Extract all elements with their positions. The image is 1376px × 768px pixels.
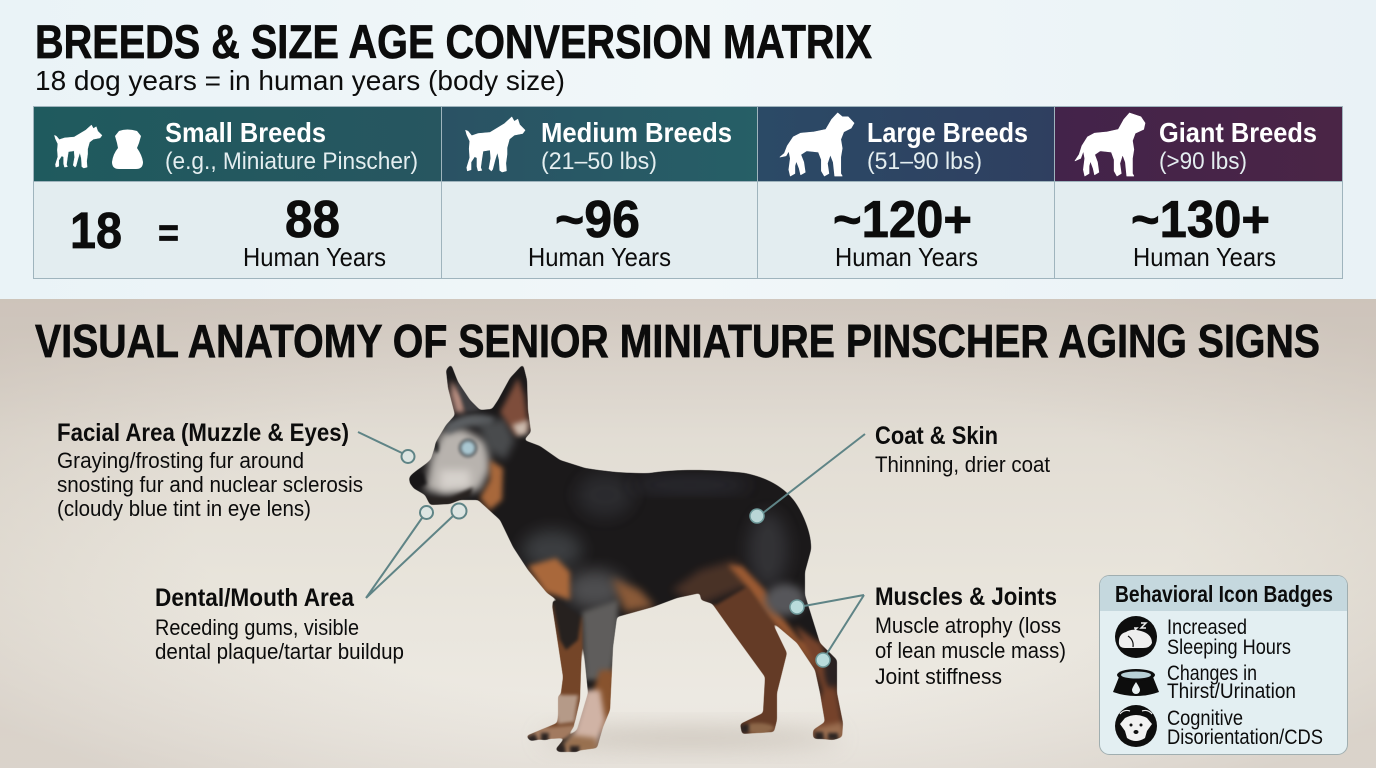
right ear inner	[500, 378, 529, 436]
annotation: dental area: Receding gums, visible	[155, 615, 359, 640]
annotation: coat and skin: Thinning, drier coat	[875, 452, 1050, 477]
far front leg	[526, 605, 582, 740]
icon: sitting puppy	[112, 130, 143, 169]
annotation: muscles and joints: Muscle atrophy (loss	[875, 613, 1061, 638]
near front leg grey	[582, 600, 618, 680]
background: top section	[0, 0, 1376, 299]
header: large breeds	[758, 107, 1054, 181]
icon: sleeping dog	[1115, 616, 1157, 658]
annotation: coat and skin	[750, 422, 1050, 523]
annotation: facial area: Graying/frosting fur around	[57, 448, 304, 473]
value: small breeds: =	[158, 211, 179, 255]
annotation: facial area: snosting fur and nuclear sclerosis	[57, 472, 363, 497]
annotation: dental area: Dental/Mouth Area	[155, 584, 355, 612]
far hind leg	[706, 575, 787, 734]
badge text: sleeping: Increased	[1167, 616, 1247, 639]
left ear inner	[451, 380, 465, 413]
annotation: muscles and joints: Muscles & Joints	[875, 583, 1057, 611]
icon: small dog	[54, 125, 102, 168]
giant breeds label: Giant Breeds	[1159, 117, 1317, 148]
value: large breeds: Human Years	[835, 242, 978, 272]
dog photo illustration	[409, 364, 845, 755]
value: small breeds: 88	[285, 191, 340, 249]
value: giant breeds: Human Years	[1133, 242, 1276, 272]
badge text: cognitive: Cognitive	[1167, 707, 1243, 730]
value: small breeds: 18	[70, 202, 122, 259]
badge text: thirst: Changes in	[1167, 662, 1257, 685]
value: small breeds	[70, 191, 386, 272]
small breeds note: (e.g., Miniature Pinscher)	[165, 148, 418, 175]
panel: behavioral icon badges: Thirst/Urination	[1167, 680, 1296, 703]
conversion matrix table	[34, 106, 1342, 278]
tan chest	[528, 558, 570, 600]
eye	[459, 439, 477, 457]
small breeds label: Small Breeds	[165, 117, 326, 148]
paw toes	[556, 724, 838, 752]
annotation: muscles and joints	[790, 583, 1066, 689]
value: large breeds: ~120+	[833, 191, 972, 249]
icon: giant dog	[1075, 113, 1145, 176]
large breeds weight: (51–90 lbs)	[867, 148, 982, 175]
panel heading: Behavioral Icon Badges	[1115, 581, 1333, 607]
floor shadow	[540, 728, 840, 748]
dog body	[409, 364, 843, 752]
grey muzzle	[425, 428, 490, 495]
annotation: dental area: dental plaque/tartar buildup	[155, 639, 404, 664]
subtitle: 18 dog years = in human years (body size)	[35, 65, 565, 96]
mouth	[426, 487, 473, 505]
annotation: facial area	[57, 419, 414, 521]
background: bottom section	[0, 299, 1376, 768]
value: medium breeds: ~96	[555, 191, 640, 249]
header: giant breeds	[1055, 107, 1342, 181]
medium breeds weight: (21–50 lbs)	[541, 148, 657, 175]
value: medium breeds: Human Years	[528, 242, 671, 272]
icon: water bowl	[1113, 669, 1159, 696]
tan belly	[612, 578, 655, 612]
tan hind stripe	[728, 565, 818, 670]
panel: behavioral icon badges: Disorientation/CDS	[1167, 726, 1323, 749]
value: small breeds: Human Years	[243, 242, 386, 272]
annotation: facial area: (cloudy blue tint in eye lens)	[57, 496, 311, 521]
annotation: muscles and joints: of lean muscle mass)	[875, 638, 1066, 663]
panel: behavioral icon badges	[1100, 576, 1348, 754]
header: medium breeds	[442, 107, 757, 181]
header: small breeds	[34, 107, 441, 181]
value: medium breeds	[528, 191, 671, 272]
icon: large dog	[780, 113, 854, 176]
nose	[409, 473, 427, 489]
annotation: muscles and joints: Joint stiffness	[875, 664, 1002, 689]
annotation: dental area	[155, 504, 466, 664]
title: BREEDS & SIZE AGE CONVERSION MATRIX	[35, 15, 872, 68]
giant breeds weight: (>90 lbs)	[1159, 148, 1247, 175]
large breeds label: Large Breeds	[867, 117, 1028, 148]
panel: behavioral icon badges: Sleeping Hours	[1167, 636, 1291, 659]
annotation: facial area: Facial Area (Muzzle & Eyes)	[57, 419, 349, 447]
annotation: coat and skin: Coat & Skin	[875, 422, 998, 450]
icon: medium dog	[466, 117, 525, 172]
coat colouring	[425, 372, 845, 755]
value: giant breeds: ~130+	[1131, 191, 1270, 249]
icon: confused dog	[1115, 705, 1157, 747]
medium breeds label: Medium Breeds	[541, 117, 732, 148]
